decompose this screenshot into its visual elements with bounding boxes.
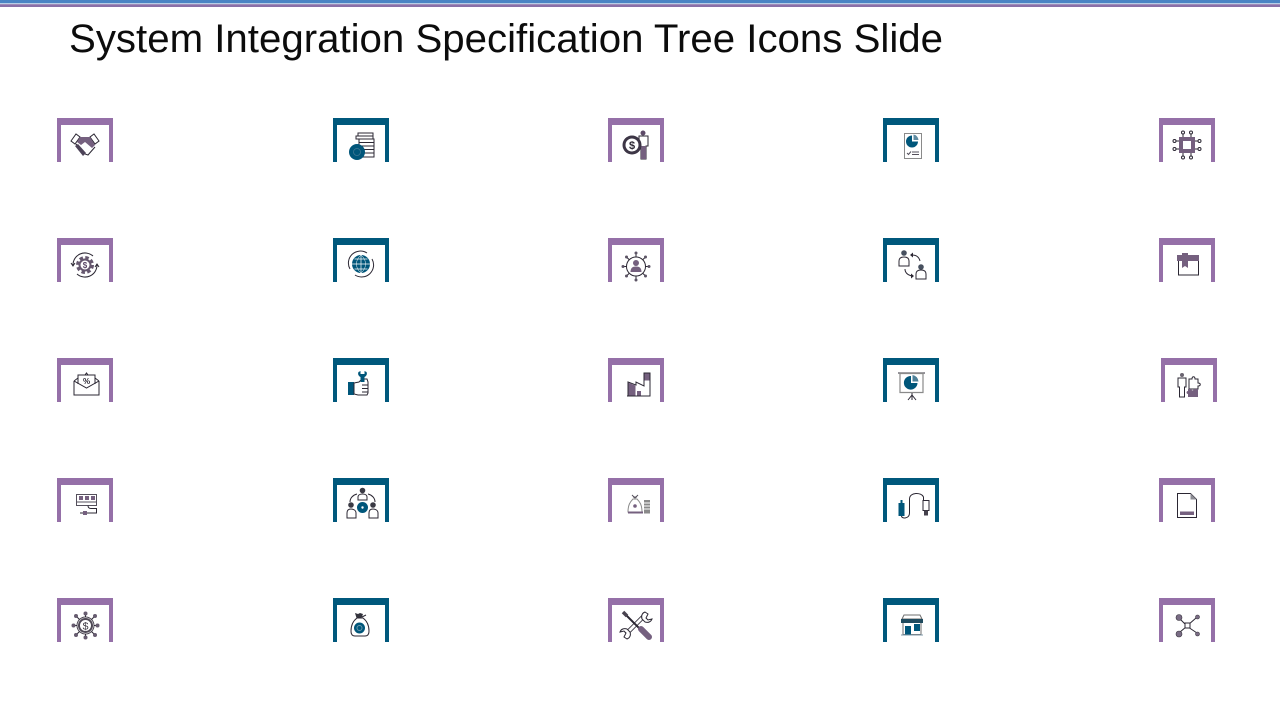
- icon: money bag and coins: [628, 495, 650, 514]
- icon: control panel with plug: [76, 494, 96, 515]
- icon: dollar coin and person: $: [629, 140, 635, 152]
- icon: presentation board: [898, 373, 925, 400]
- icon: hand holding wrench: [348, 371, 368, 395]
- tile: people exchange: [883, 238, 939, 282]
- tile: storefront: [883, 598, 939, 642]
- tile: presentation board: [883, 358, 939, 402]
- icon: dollar gear cycle: $: [83, 261, 88, 270]
- tile: money bag: [333, 598, 389, 642]
- tile: gift box: [1159, 238, 1215, 282]
- tile: handshake: [57, 118, 113, 162]
- title: System Integration Specification Tree Icons Slide: [69, 17, 943, 61]
- tile: charging cable: [883, 478, 939, 522]
- tile: person hub: [608, 238, 664, 282]
- icon: person hub: [622, 252, 650, 282]
- icon: charging cable: [898, 493, 929, 518]
- top rule: purple: [0, 4, 1280, 7]
- tile: network nodes: [1159, 598, 1215, 642]
- icon: network nodes: [1176, 614, 1200, 637]
- icon: people exchange: [899, 250, 926, 279]
- icon: microchip: [1173, 131, 1201, 159]
- tile: hand holding wrench: [333, 358, 389, 402]
- tile: pie chart report: [883, 118, 939, 162]
- tile: coin stack: [333, 118, 389, 162]
- icon: factory: [627, 373, 650, 396]
- tile: person with puzzle: [1161, 358, 1217, 402]
- tile: team around gear: [333, 478, 389, 522]
- tile: crossed tools: [608, 598, 664, 642]
- icon: person with puzzle: [1178, 373, 1200, 397]
- tile: dollar hub: [57, 598, 113, 642]
- icon: percent envelope: %: [83, 377, 90, 386]
- tile: globe cycle: [333, 238, 389, 282]
- tile: factory: [608, 358, 664, 402]
- tile: microchip: [1159, 118, 1215, 162]
- tile: dollar coin and person: [608, 118, 664, 162]
- icon: team around gear: [347, 488, 378, 518]
- top rule: blue: [0, 0, 1280, 3]
- icon: money bag: [351, 613, 369, 636]
- icon: globe cycle: [348, 251, 374, 277]
- icon: storefront: [901, 615, 923, 635]
- icon: pie chart report: [904, 134, 922, 158]
- tile: document: [1159, 478, 1215, 522]
- tile: money bag and coins: [608, 478, 664, 522]
- icon: coin stack: [349, 133, 374, 160]
- icon: crossed tools: [620, 612, 652, 639]
- icon: dollar hub: $: [83, 620, 89, 632]
- icon: document: [1178, 494, 1196, 518]
- tile: dollar gear cycle: [57, 238, 113, 282]
- icon: handshake: [71, 134, 99, 156]
- icon: gift box: [1177, 253, 1199, 275]
- tile: control panel with plug: [57, 478, 113, 522]
- tile: percent envelope: [57, 358, 113, 402]
